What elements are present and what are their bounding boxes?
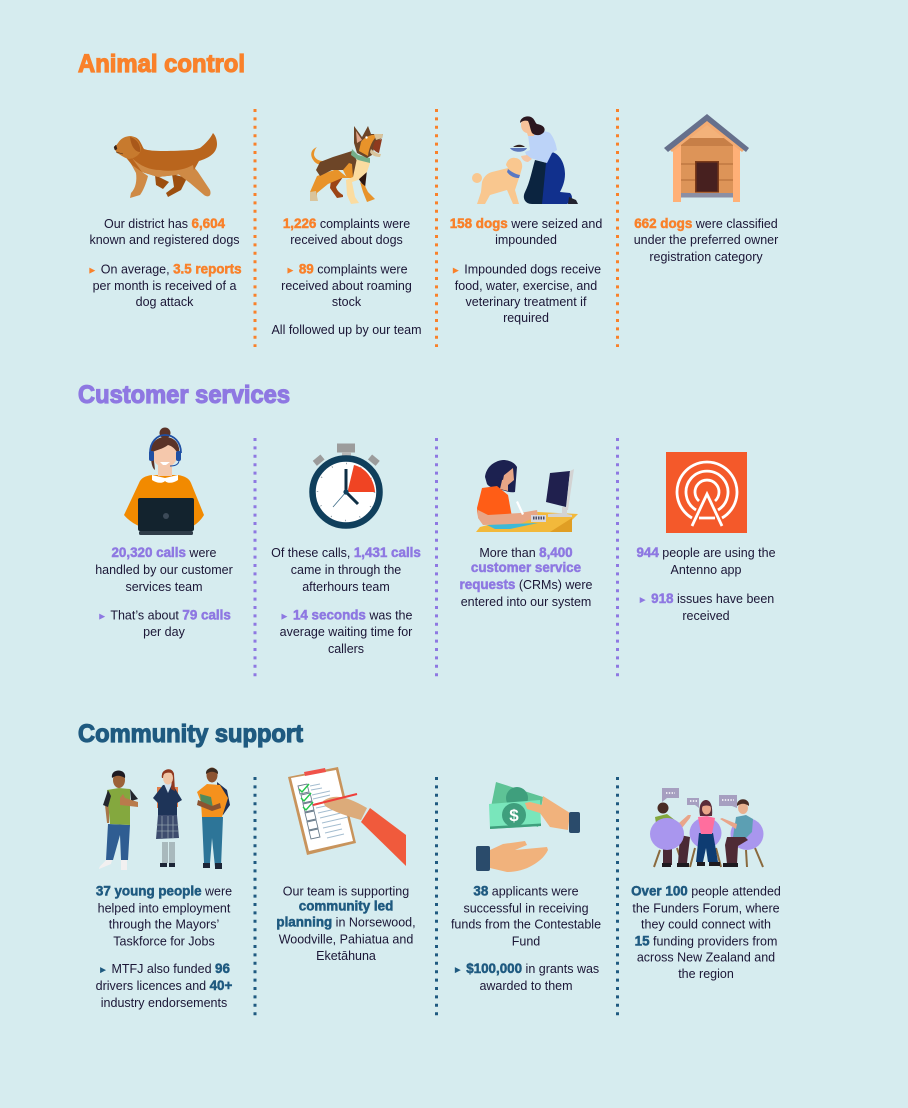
panel: young people: through the Mayors’: [109, 918, 219, 932]
panel: service requests: customer service: [471, 560, 581, 575]
panel: funders forum: the Funders Forum, where: [632, 902, 780, 916]
panel: community planning: planning in Norsewood,: [276, 914, 416, 930]
panel: contestable fund: [451, 782, 601, 993]
icon: call centre agent: [124, 428, 204, 535]
panel: community planning: community led: [299, 898, 393, 914]
panel: after hours: average waiting time for: [280, 625, 412, 639]
icon: antenno logo: [666, 452, 747, 533]
panel: service requests: [460, 460, 592, 609]
panel: complaints: [271, 126, 422, 337]
panel: seized dogs: veterinary treatment if: [466, 295, 587, 309]
panel: complaints: stock: [332, 295, 362, 309]
text: 944 people: 944 people are using the: [636, 545, 776, 560]
heading: community support: Community support: [78, 720, 304, 748]
text: over 100 people: Over 100 people attended: [631, 884, 781, 898]
panel: service requests: requests (CRMs) were: [460, 577, 592, 592]
text: community led planning: Our team is supporting: [283, 884, 409, 898]
panel: registered dogs: known and registered dogs: [89, 233, 240, 247]
panel: after hours: [271, 444, 421, 656]
panel: contestable fund: awarded to them: [479, 979, 573, 993]
panel: registered dogs: dog attack: [136, 295, 194, 309]
section: customer services: [78, 381, 776, 678]
icon: person at desk: [476, 460, 578, 532]
panel: community planning: [276, 767, 416, 963]
text: 918 issues: ► 918 issues have been: [638, 591, 774, 606]
text: 662 dogs: 662 dogs were classified: [634, 216, 778, 231]
icon: kennel: [664, 114, 749, 202]
panel: registered dogs: per month is received of a: [93, 279, 236, 293]
panel: contestable fund: Fund: [512, 934, 540, 948]
icon: woman feeding dog: [472, 116, 578, 204]
panel: young people: [96, 768, 233, 1010]
panel: seized dogs: [450, 116, 602, 325]
panel: seized dogs: food, water, exercise, and: [455, 279, 597, 293]
panel: antenno app: Antenno app: [671, 563, 741, 577]
text: 89 complaints: ► 89 complaints were: [285, 262, 408, 276]
text: impounded care: ► Impounded dogs receive: [451, 262, 601, 276]
panel: community planning: Eketāhuna: [316, 949, 376, 963]
panel: calls handled: [95, 428, 233, 639]
panel: calls handled: handled by our customer: [95, 563, 233, 577]
panel: contestable fund: funds from the Contestable: [451, 918, 601, 932]
text: 20,320 calls: 20,320 calls were: [111, 545, 217, 560]
panel: service requests: entered into our system: [461, 595, 591, 609]
panel: registered dogs: [87, 133, 242, 309]
panel: funders forum: 15 funding providers from: [635, 934, 777, 948]
text: 6,604 dogs: Our district has 6,604: [104, 216, 226, 231]
panel: funders forum: they could connect with: [641, 918, 771, 932]
panel: preferred owners: [634, 114, 778, 264]
panel: funders forum: across New Zealand and: [637, 950, 775, 964]
panel: funders forum: [631, 788, 781, 981]
icon: money and hands: [476, 782, 580, 872]
panel: community planning: Woodville, Pahiatua and: [279, 932, 413, 946]
icon: money and hands: $: [509, 806, 519, 825]
heading: animal control: Animal control: [78, 50, 245, 78]
section: community support: [78, 720, 781, 1016]
panel: complaints: received about roaming: [281, 279, 412, 293]
icon: barking dog: [310, 126, 383, 204]
panel: young people: drivers licences and 40+: [96, 978, 233, 993]
text: followed up: All followed up by our team: [271, 323, 422, 337]
panel: calls handled: per day: [143, 625, 186, 639]
panel: after hours: came in through the: [291, 563, 401, 577]
text: 14 seconds: ► 14 seconds was the: [280, 608, 412, 622]
text: 8,400 requests: More than 8,400: [479, 545, 573, 560]
panel: young people: helped into employment: [98, 902, 231, 916]
panel: contestable fund: successful in receiving: [463, 902, 589, 916]
panel: complaints: received about dogs: [290, 233, 403, 247]
icon: three young people: [99, 768, 230, 870]
section: animal control: [78, 50, 778, 347]
icon: people talking: [650, 788, 764, 867]
panel: seized dogs: required: [503, 311, 549, 325]
panel: antenno app: received: [682, 609, 730, 623]
icon: clipboard and hand: [288, 767, 406, 866]
panel: preferred owners: registration category: [649, 250, 763, 264]
text: 1,431 calls: Of these calls, 1,431 calls: [271, 545, 421, 560]
panel: young people: Taskforce for Jobs: [113, 934, 215, 948]
text: 1,226 complaints: 1,226 complaints were: [283, 216, 410, 231]
text: $100,000: ► $100,000 in grants was: [453, 961, 599, 976]
text: 38 applicants: 38 applicants were: [473, 884, 579, 898]
text: 158 dogs: 158 dogs were seized and: [450, 216, 602, 231]
panel: antenno app: [636, 452, 776, 623]
panel: calls handled: services team: [125, 580, 203, 594]
text: licences: ► MTFJ also funded 96: [98, 961, 230, 976]
panel: after hours: afterhours team: [302, 580, 390, 594]
panel: young people: industry endorsements: [101, 996, 227, 1010]
icon: stopwatch: [312, 444, 380, 526]
text: 79 calls: ► That’s about 79 calls: [97, 608, 231, 622]
panel: funders forum: the region: [678, 967, 734, 981]
icon: golden retriever: [114, 133, 217, 198]
text: 37 young people: 37 young people were: [96, 884, 232, 898]
text: 3.5 reports: ► On average, 3.5 reports: [87, 262, 242, 276]
panel: preferred owners: under the preferred owner: [634, 233, 778, 247]
panel: after hours: callers: [328, 642, 364, 656]
panel: seized dogs: impounded: [495, 233, 557, 247]
heading: customer services: Customer services: [78, 381, 290, 409]
